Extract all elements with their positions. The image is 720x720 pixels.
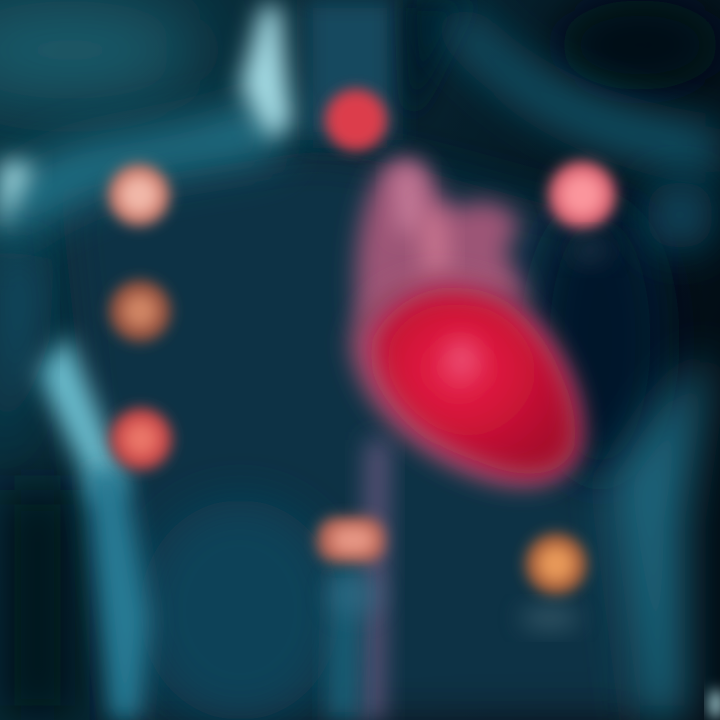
marker: left lower <box>110 408 172 470</box>
neck highlight <box>240 5 292 140</box>
left shoulder highlight <box>0 160 35 235</box>
heart core glow <box>446 340 478 380</box>
top-left glow <box>0 0 200 100</box>
marker: lower centre <box>317 517 385 563</box>
label smudge: lower right <box>520 606 580 630</box>
label smudge: lower centre <box>329 573 381 617</box>
marker: left upper <box>108 164 170 226</box>
heart <box>350 159 582 486</box>
heart vessel highlight <box>392 165 425 235</box>
marker: throat <box>325 89 387 151</box>
bottom-right corner highlight <box>710 689 720 719</box>
right shoulder patch <box>645 180 715 250</box>
label smudge: right upper <box>570 236 610 264</box>
marker: right upper <box>548 161 616 229</box>
central vessel <box>360 440 390 720</box>
neck <box>305 0 470 140</box>
heart vessels <box>356 159 530 330</box>
marker: lower right <box>525 533 587 595</box>
marker: left middle <box>109 280 171 342</box>
left arm lower <box>85 470 150 720</box>
abdomen <box>140 500 340 720</box>
left arm line <box>35 335 125 505</box>
heart body <box>375 292 575 474</box>
right chest dark <box>535 200 665 480</box>
upper right dark <box>560 0 720 90</box>
lower-left dark area <box>0 490 75 720</box>
heart outer glow <box>350 277 582 486</box>
blue vessel beside central <box>328 570 360 720</box>
right shoulder band <box>440 5 720 175</box>
left shoulder band <box>0 95 280 255</box>
heart vessel fold <box>420 210 450 280</box>
right arm band <box>610 350 710 720</box>
left arm edge <box>0 250 40 460</box>
